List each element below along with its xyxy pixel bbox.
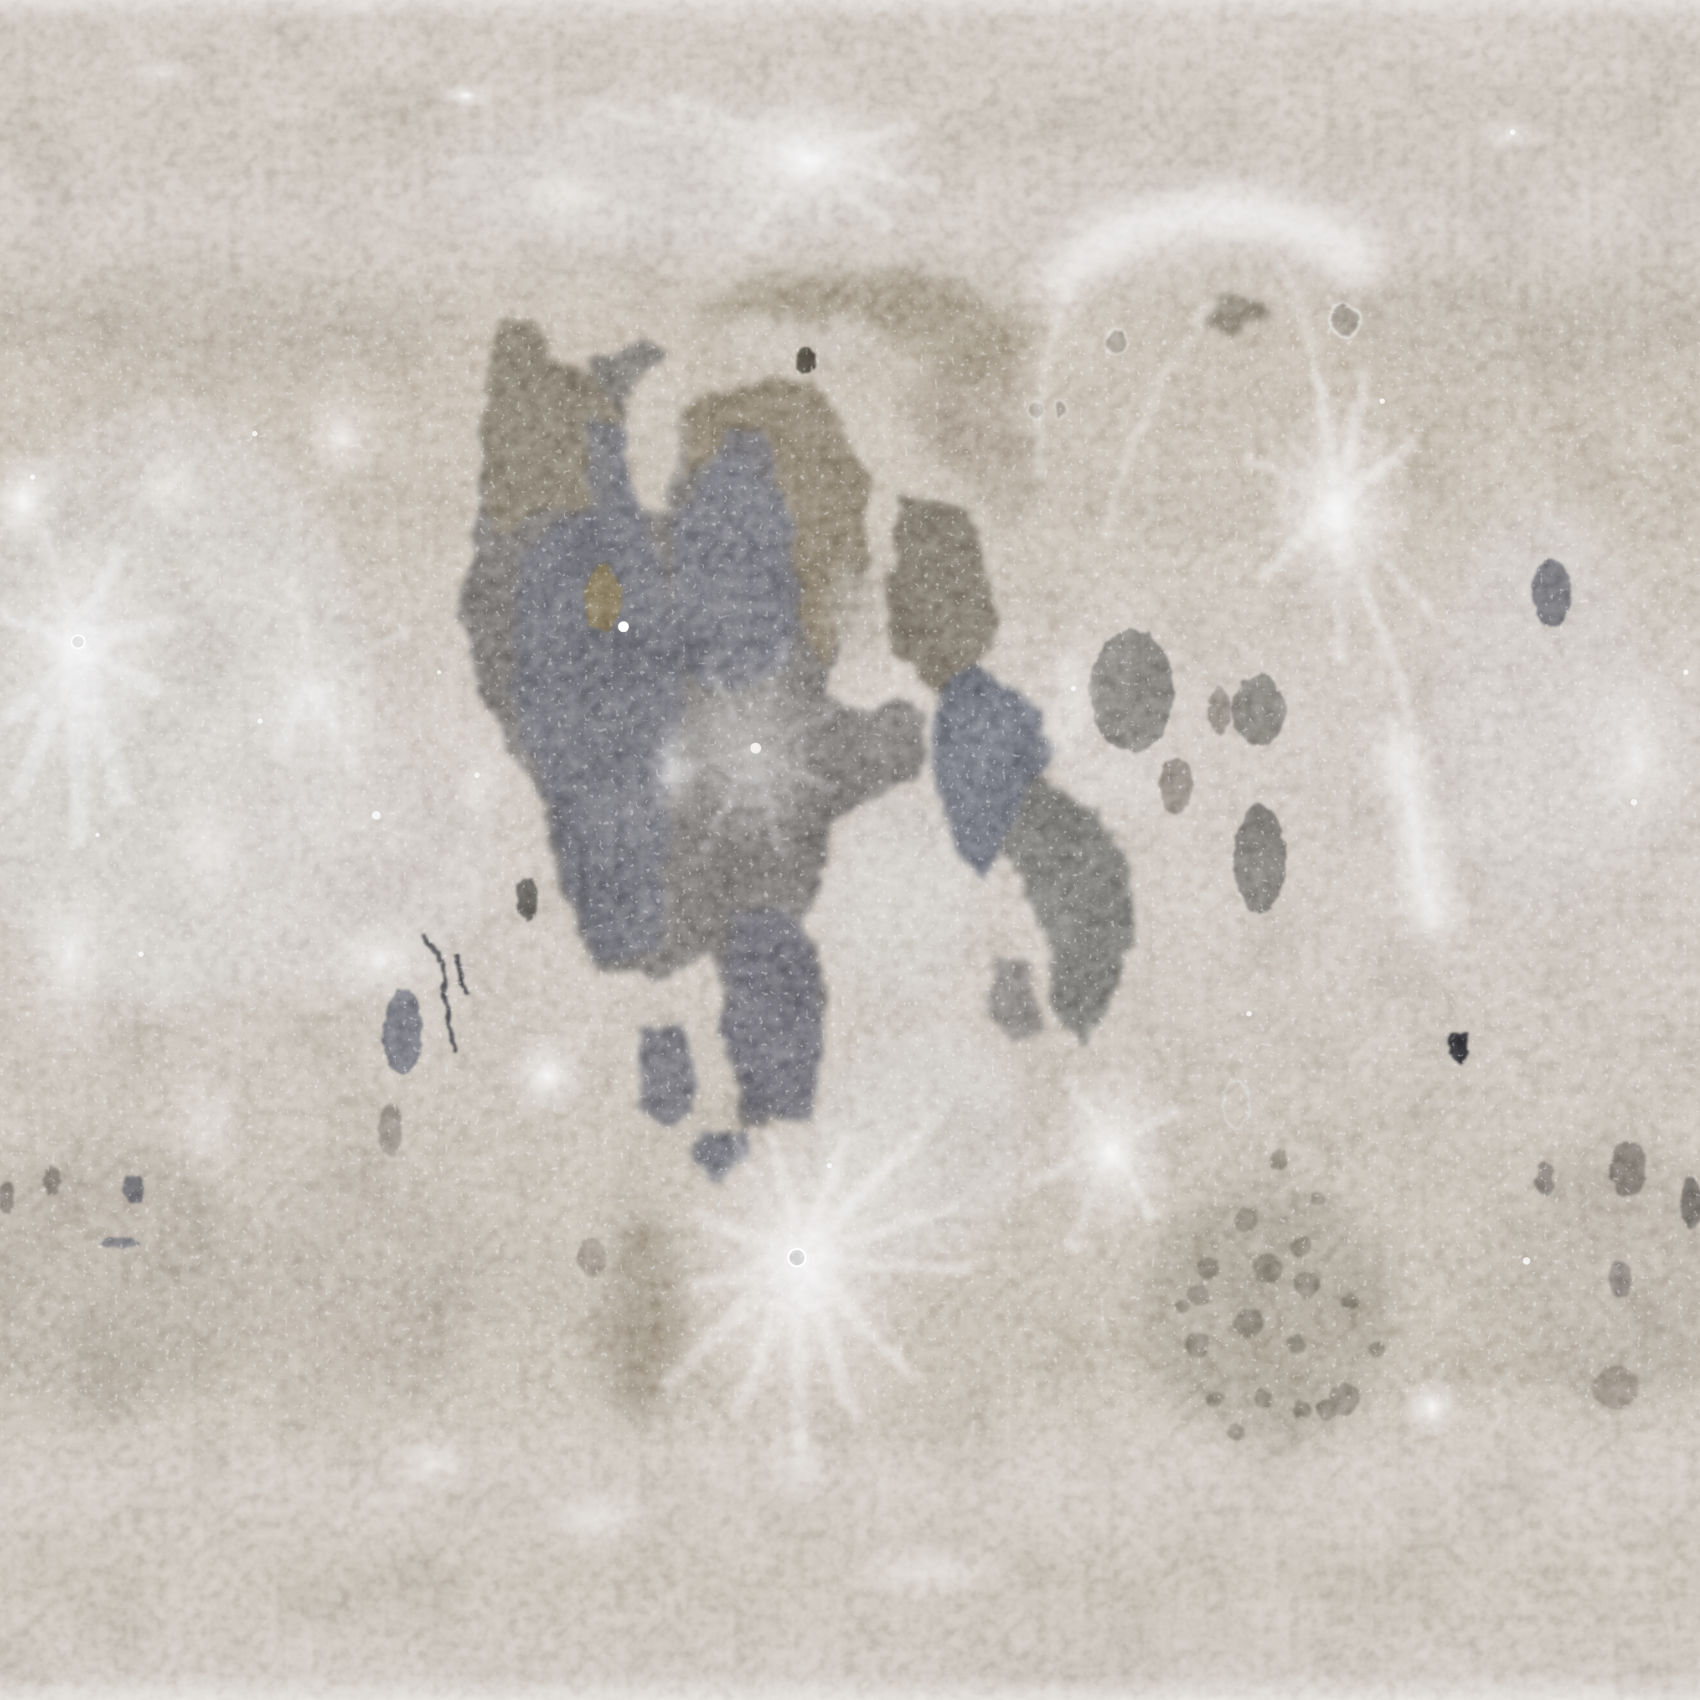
rays: northeast arc (1039, 211, 1371, 542)
far-side dark patches (0, 305, 1700, 1409)
rays: Kepler glow (646, 720, 698, 824)
mare: Procellarum, Imbrium and Nubium main body (461, 317, 927, 1128)
mare: Crisium (1090, 630, 1174, 751)
rays: far-west column (18, 846, 123, 1062)
mare: Smythii (1206, 291, 1263, 338)
mare: Tranquillitatis (930, 667, 1065, 878)
crater: Moscoviense (1532, 559, 1571, 627)
rays: north crater (585, 89, 943, 243)
mare: Nubium east (724, 911, 826, 1119)
broad highland tonal variation (0, 98, 1700, 1447)
mare: Imbrium brown (681, 371, 867, 672)
mare: Procellarum blue-grey band (510, 417, 683, 960)
mare: Imbrium blue core (670, 423, 804, 694)
Aristarchus plateau (584, 566, 621, 631)
South Pole-Aitken dark craters (1175, 1150, 1385, 1439)
rays: Tycho (659, 1090, 976, 1453)
rays: upper west star (298, 387, 385, 491)
fine bright crater speckle (0, 263, 1700, 1462)
mare: Serenitatis (887, 493, 995, 696)
brown bands north of the maria (618, 266, 1035, 1393)
bright highland ridges around the maria (638, 321, 1182, 850)
rays: Ohm (0, 526, 176, 846)
mare: Humorum south tip (694, 1128, 748, 1184)
crater: far-west dark specks (123, 1175, 142, 1203)
mare: Procellarum northwest brown (485, 317, 618, 542)
rays: Giordano Bruno (1244, 365, 1438, 661)
rays: Stevinus-Furnerius (1032, 1066, 1182, 1258)
rays: long streak south of Giordano Bruno (1334, 542, 1437, 932)
crater: northeast near-limb patches (1232, 675, 1286, 745)
crater: Ingenii (383, 989, 422, 1076)
crater: Tsiolkovsky (1448, 1031, 1469, 1065)
crater: Grimaldi (517, 878, 537, 922)
mare: Fecunditatis (1003, 775, 1138, 1049)
rays: west star (504, 1032, 591, 1119)
crater: Plato (795, 347, 816, 375)
crater: west patch (378, 1104, 402, 1156)
rays: Byrd (242, 577, 410, 778)
rays: Copernicus (658, 640, 838, 860)
lunar maria, near side (461, 291, 1263, 1184)
small bright crater specks (30, 130, 1689, 1265)
mare: small dark north patch (585, 336, 664, 401)
rays: Aristarchus (618, 621, 629, 632)
mare: Nectaris (987, 954, 1039, 1046)
crater: Orientale rim fissures (425, 935, 466, 1052)
rays: far-west upper star (0, 445, 69, 557)
mare: Nubium west (640, 1025, 699, 1133)
